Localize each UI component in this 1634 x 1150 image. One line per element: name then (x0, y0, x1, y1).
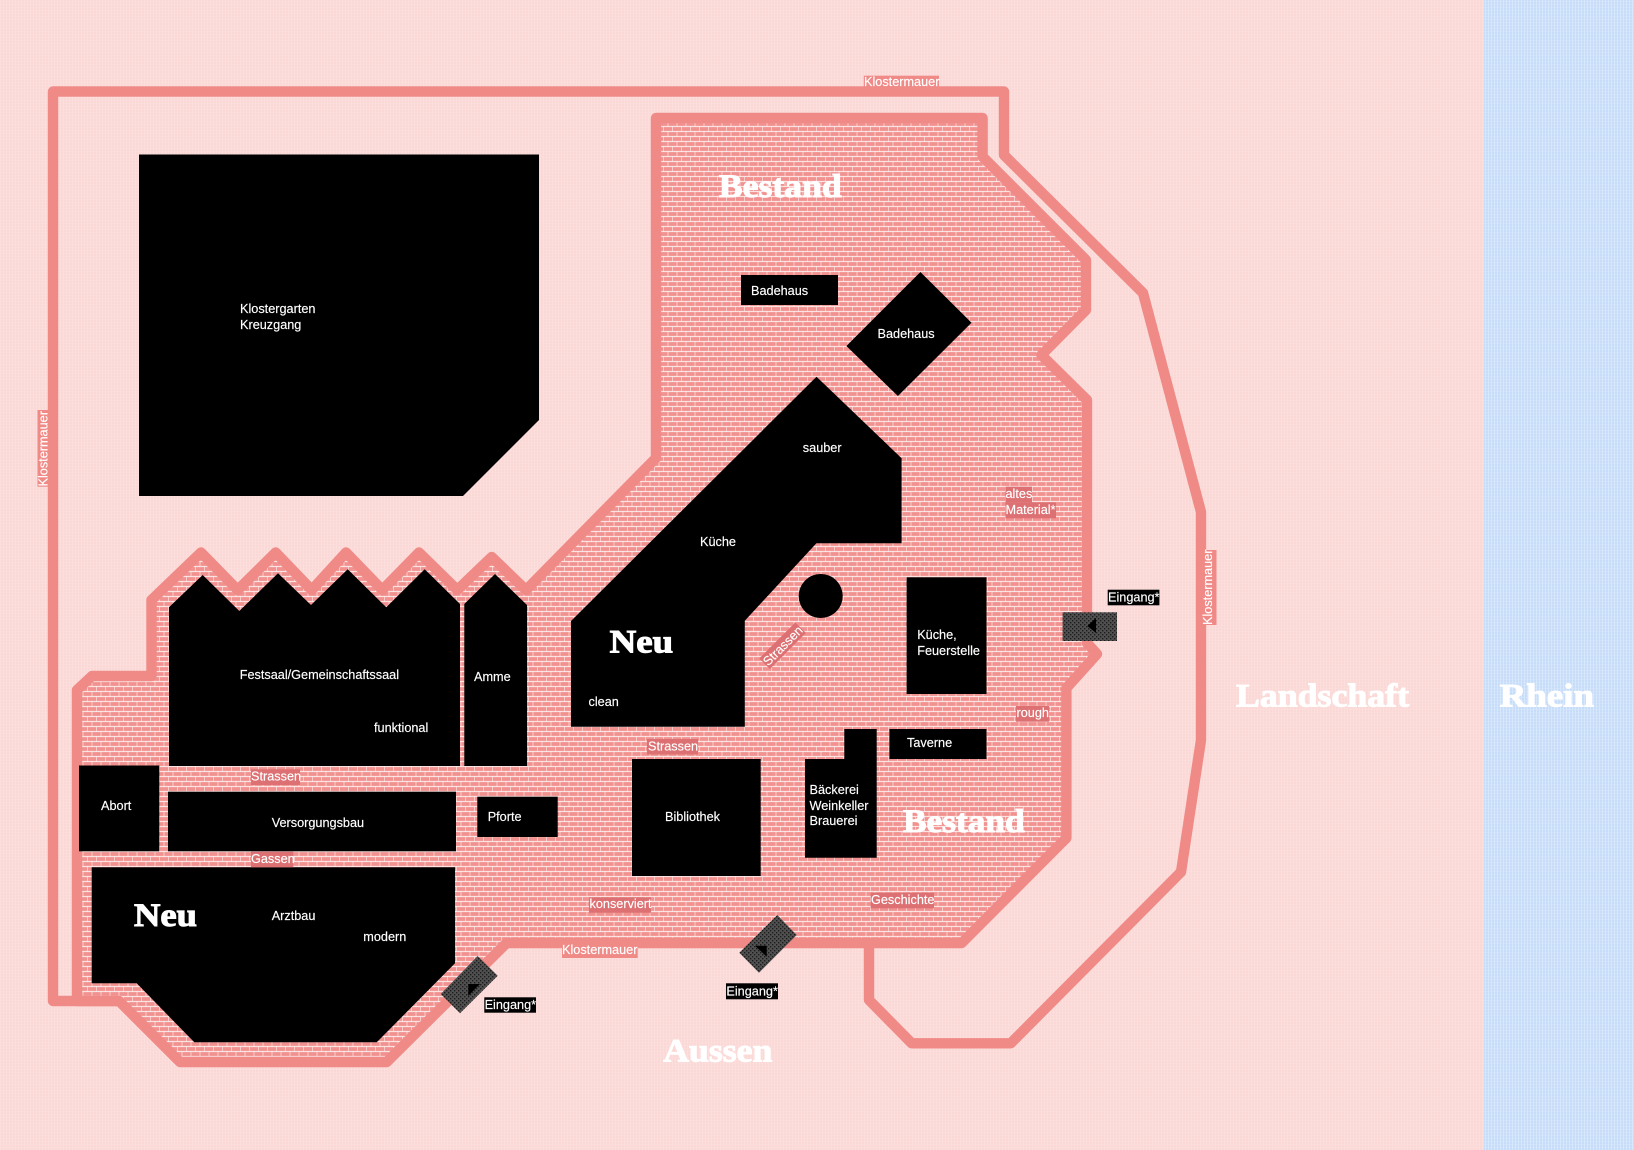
building: Festsaal (169, 569, 460, 766)
building: Klostergarten Kreuzgang: Kreuzgang (240, 318, 301, 332)
building: Badehaus diamond: Badehaus (878, 327, 935, 341)
building: Arztbau new: Neu (134, 898, 197, 934)
label: Klostermauer left: Klostermauer (36, 410, 50, 486)
building: Pforte (477, 797, 558, 837)
entrance: south door (739, 915, 797, 973)
heading: Bestand bottom: Bestand (903, 804, 1025, 840)
entrance: east door (1063, 612, 1117, 641)
building: Taverne: Taverne (907, 736, 952, 750)
label: Eingang south: Eingang* (726, 984, 778, 998)
building: Badehaus rectangle (741, 275, 838, 305)
building: Abort: Abort (101, 799, 132, 813)
heading: Landschaft: Landschaft (1236, 678, 1409, 714)
building: Küche new (571, 377, 902, 727)
building: Arztbau new: Arztbau (272, 909, 315, 923)
building: Arztbau new: modern (363, 930, 406, 944)
building: Versorgungsbau (168, 792, 456, 851)
building: Klostergarten Kreuzgang: Klostergarten (240, 302, 315, 316)
built area: brick-filled existing precinct (77, 118, 1097, 1062)
entrance: south-west door (441, 956, 498, 1013)
label: Strassen diagonal: Strassen (760, 623, 806, 669)
building: Pforte: Pforte (488, 810, 522, 824)
label: Klostermauer right: Klostermauer (1201, 549, 1215, 625)
building: Bäckerei Weinkeller Brauerei (805, 729, 877, 858)
label: Klostermauer top: Klostermauer (864, 75, 940, 89)
building: Amme: Amme (474, 670, 511, 684)
label: Eingang east: Eingang* (1108, 590, 1160, 604)
label: Geschichte: Geschichte (871, 893, 934, 907)
building: Festsaal: Festsaal/Gemeinschaftssaal (240, 668, 399, 682)
label: altes Material: altes (1006, 487, 1032, 501)
building: Küche new: Neu (610, 624, 673, 660)
heading: Bestand top: Bestand (719, 169, 842, 205)
building: Festsaal: funktional (374, 721, 428, 735)
building: Küche, Feuerstelle (907, 577, 986, 694)
label: Strassen left: Strassen (251, 770, 301, 784)
building: Amme (464, 574, 527, 766)
building: round tower (799, 574, 843, 618)
building: Arztbau new (92, 867, 455, 1042)
building: Bäckerei Weinkeller Brauerei: Weinkeller (810, 799, 869, 813)
building: Klostergarten Kreuzgang (139, 154, 539, 496)
heading: Rhein: Rhein (1500, 678, 1594, 714)
building: Küche, Feuerstelle: Küche, (917, 628, 957, 642)
building: Küche new: sauber (803, 441, 842, 455)
label: konserviert: konserviert (590, 897, 652, 911)
building: Küche new: clean (588, 695, 619, 709)
label: altes Material: Material* (1006, 503, 1056, 517)
building: Bäckerei Weinkeller Brauerei: Brauerei (810, 814, 857, 828)
building: Abort (79, 766, 159, 851)
background: Rhine river band (1484, 0, 1634, 1150)
building: Badehaus diamond (846, 272, 972, 396)
label: Strassen middle: Strassen (648, 740, 698, 754)
label: Gassen: Gassen (251, 852, 295, 866)
building: Küche new: Küche (700, 535, 736, 549)
building: Versorgungsbau: Versorgungsbau (272, 816, 364, 830)
building: Bäckerei Weinkeller Brauerei: Bäckerei (810, 783, 859, 797)
building: Taverne (889, 729, 986, 759)
outer monastery wall (53, 92, 1201, 1043)
building: Küche, Feuerstelle: Feuerstelle (917, 644, 980, 658)
heading: Aussen: Aussen (663, 1034, 772, 1070)
building: Bibliothek: Bibliothek (665, 810, 721, 824)
building: Badehaus rectangle: Badehaus (751, 284, 808, 298)
label: Eingang south-west: Eingang* (485, 998, 536, 1012)
label: Klostermauer bottom: Klostermauer (562, 943, 638, 957)
building: Bibliothek (632, 759, 761, 876)
label: rough: rough (1016, 706, 1049, 720)
label: altes Material (1006, 487, 1056, 518)
